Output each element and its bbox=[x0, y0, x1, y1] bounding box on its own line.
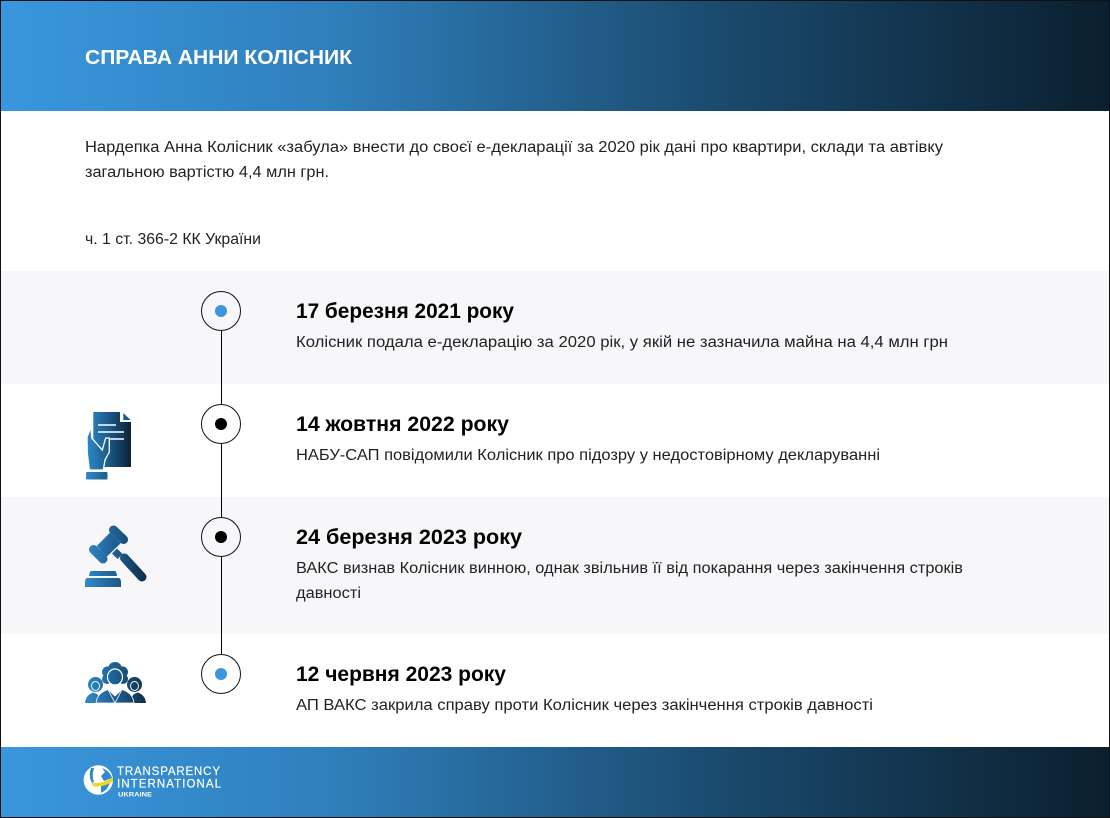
icon: hand holding document bbox=[86, 412, 131, 480]
intro text: загальною вартістю 4,4 млн грн. bbox=[85, 164, 329, 181]
footer logo bbox=[84, 765, 222, 798]
footer logo: UKRAINE bbox=[118, 792, 153, 798]
event 2: НАБУ-САП повідомили Колісник про підозру у недостовірному декларуванні bbox=[296, 447, 880, 464]
icon: judge gavel bbox=[85, 530, 142, 587]
timeline marker 4 bbox=[202, 654, 240, 694]
event 1 bbox=[296, 300, 948, 351]
row background: 17 March 2021 bbox=[1, 271, 1109, 384]
event 1: Колісник подала е-декларацію за 2020 рік, у якій не зазначила майна на 4,4 млн грн bbox=[296, 334, 948, 351]
intro text: Нардепка Анна Колісник «забула» внести до своєї е-декларації за 2020 рік дані про квартири, склади та автівку bbox=[85, 139, 943, 156]
footer banner bbox=[1, 747, 1109, 817]
event 3: 24 березня 2023 року bbox=[296, 526, 522, 549]
event 2: 14 жовтня 2022 року bbox=[296, 413, 509, 436]
title: СПРАВА АННИ КОЛІСНИК bbox=[85, 47, 353, 69]
timeline marker 2 bbox=[202, 404, 240, 444]
event 4: АП ВАКС закрила справу проти Колісник через закінчення строків давності bbox=[296, 697, 873, 714]
intro text bbox=[85, 139, 943, 181]
timeline marker 3 bbox=[202, 518, 240, 556]
event 1: 17 березня 2021 року bbox=[296, 300, 514, 323]
event 4 bbox=[296, 663, 873, 714]
header banner bbox=[1, 1, 1109, 111]
icon: group of three judges bbox=[85, 662, 146, 703]
event 3 bbox=[296, 526, 963, 602]
event 2 bbox=[296, 413, 880, 464]
footer logo: INTERNATIONAL bbox=[117, 778, 222, 790]
footer logo: TRANSPARENCY bbox=[117, 766, 220, 778]
event 3: ВАКС визнав Колісник винною, однак звільнив її від покарання через закінчення строків bbox=[296, 560, 963, 577]
row background: 24 March 2023 bbox=[1, 497, 1109, 634]
event 3: давності bbox=[296, 585, 361, 602]
timeline line bbox=[220, 330, 222, 655]
event 4: 12 червня 2023 року bbox=[296, 663, 506, 686]
timeline marker 1 bbox=[202, 292, 240, 330]
legal article reference: ч. 1 ст. 366-2 КК України bbox=[85, 231, 261, 248]
